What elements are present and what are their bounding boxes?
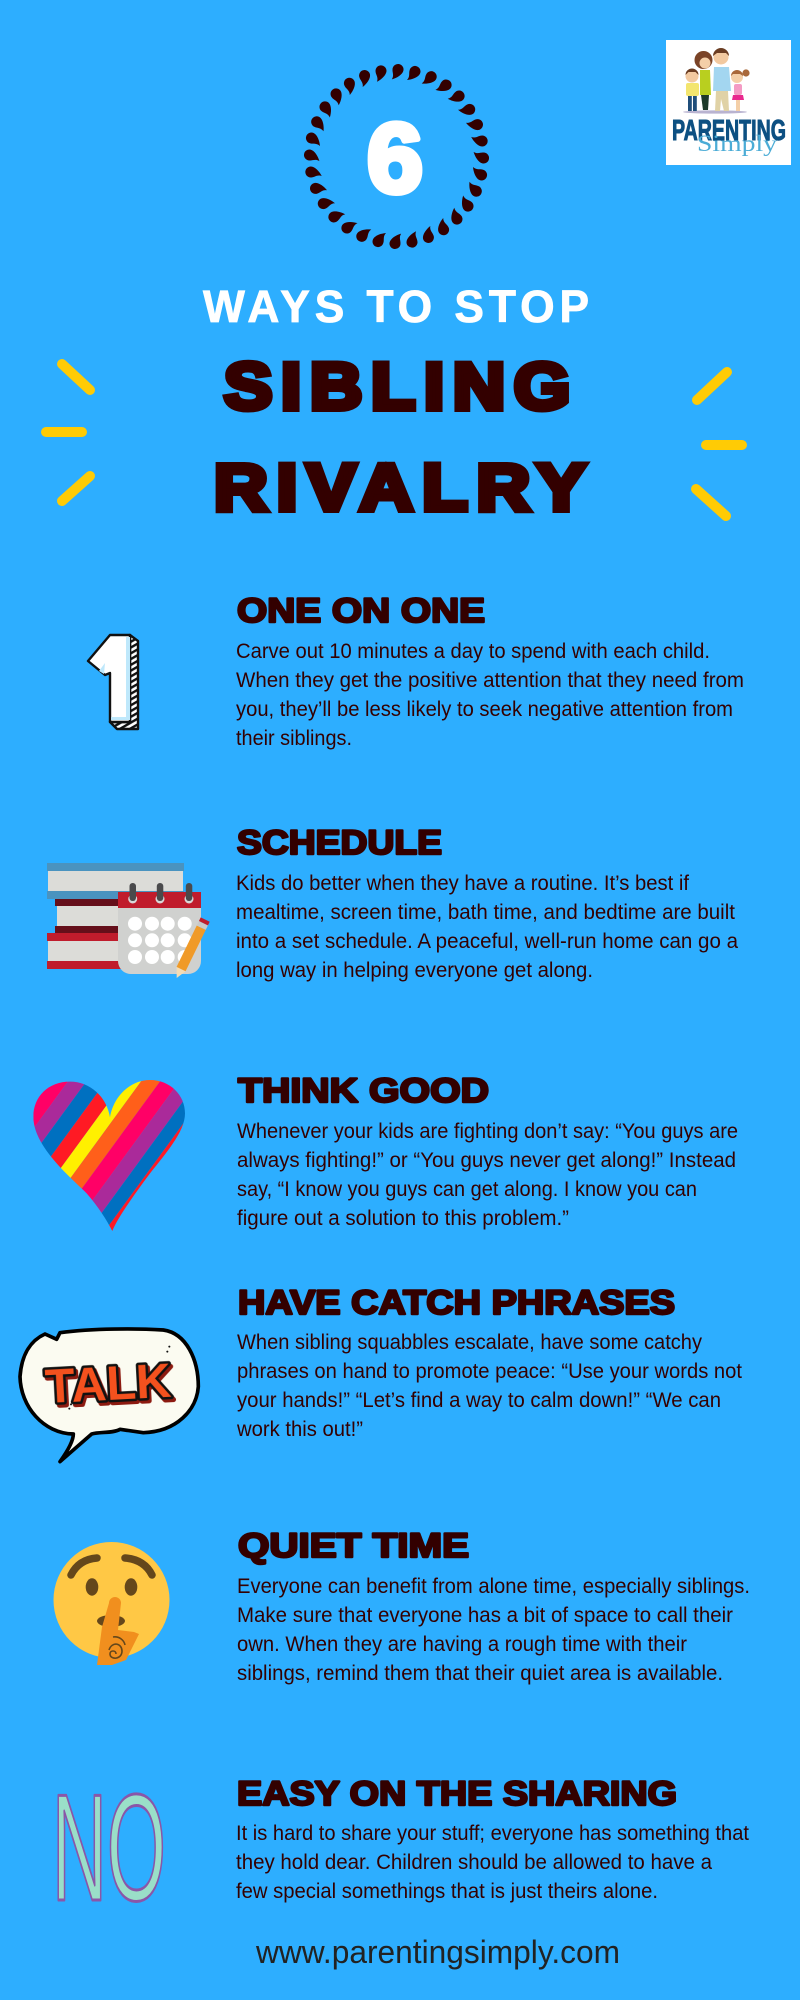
heading: HAVE CATCH PHRASES [238, 1284, 675, 1322]
panel: schedule [47, 824, 738, 982]
boy [686, 68, 699, 111]
subtitle: WAYS TO STOP [203, 281, 594, 332]
body text [237, 1120, 738, 1230]
icon: outlined NO: NO [52, 1763, 166, 1933]
body text: Whenever your kids are fighting don’t say: “You guys are [237, 1120, 738, 1143]
girl [731, 69, 750, 111]
body text: into a set schedule. A peaceful, well-run home can go a [236, 930, 738, 953]
body text: few special somethings that is just theirs alone. [236, 1880, 658, 1903]
footer website: www.parentingsimply.com [255, 1934, 620, 1970]
title line two: RIVALRY [214, 450, 595, 524]
panel: easy on the sharing [52, 1763, 749, 1933]
mother [694, 51, 712, 110]
logo script: Simply [697, 131, 778, 156]
body text: work this out!” [236, 1418, 363, 1441]
body text [236, 1331, 742, 1441]
body text: Make sure that everyone has a bit of space to call their [237, 1604, 733, 1627]
panel: think good [33, 1077, 738, 1231]
panel: one on one [88, 592, 744, 750]
body text [236, 640, 744, 750]
heading: SCHEDULE [237, 824, 442, 862]
logo: Parenting Simply [666, 40, 791, 165]
heading: THINK GOOD [238, 1072, 489, 1110]
body text: siblings, remind them that their quiet area is available. [237, 1662, 723, 1685]
icon: TALK speech bubble: TALK [44, 1355, 173, 1414]
icon: books and calendar [47, 863, 210, 980]
icon: shushing face emoji [54, 1542, 170, 1665]
panel: have catch phrases [20, 1284, 742, 1462]
icon: TALK speech bubble [20, 1329, 198, 1462]
ring of drops [304, 64, 489, 249]
father [713, 48, 731, 111]
badge: number 6 inside a ring of drops [304, 64, 489, 249]
body text: your hands!” “Let’s find a way to calm down!” “We can [237, 1389, 721, 1412]
heading: EASY ON THE SHARING [237, 1775, 677, 1813]
icon: 3D number one [88, 635, 138, 729]
title line one: SIBLING [224, 349, 579, 423]
body text: always fighting!” or “You guys never get along!” Instead [237, 1149, 736, 1172]
heading: QUIET TIME [238, 1527, 469, 1565]
body text: When sibling squabbles escalate, have some catchy [237, 1331, 702, 1354]
body text: Kids do better when they have a routine. It’s best if [236, 872, 689, 895]
number 6: 6 [367, 103, 423, 213]
body text: you, they’ll be less likely to seek negative attention from [236, 698, 733, 721]
panel: quiet time [54, 1527, 750, 1685]
body text: their siblings. [236, 727, 352, 750]
body text: own. When they are having a rough time with their [237, 1633, 687, 1656]
body text: long way in helping everyone get along. [236, 959, 593, 982]
body text: mealtime, screen time, bath time, and bedtime are built [236, 901, 735, 924]
body text [236, 872, 738, 982]
body text: say, “I know you guys can get along. I know you can [237, 1178, 697, 1201]
body text: When they get the positive attention that they need from [236, 669, 744, 692]
heading: ONE ON ONE [237, 592, 485, 630]
body text [236, 1822, 749, 1903]
body text: Everyone can benefit from alone time, especially siblings. [237, 1575, 750, 1598]
body text: figure out a solution to this problem.” [237, 1207, 569, 1230]
body text: Carve out 10 minutes a day to spend with each child. [236, 640, 710, 663]
body text [237, 1575, 750, 1685]
icon: rainbow striped heart [33, 1080, 185, 1231]
yellow accent dashes [46, 364, 742, 516]
body text: they hold dear. Children should be allowed to have a [236, 1851, 712, 1874]
body text: phrases on hand to promote peace: “Use your words not [237, 1360, 742, 1383]
title [203, 281, 595, 524]
body text: It is hard to share your stuff; everyone has something that [236, 1822, 749, 1845]
